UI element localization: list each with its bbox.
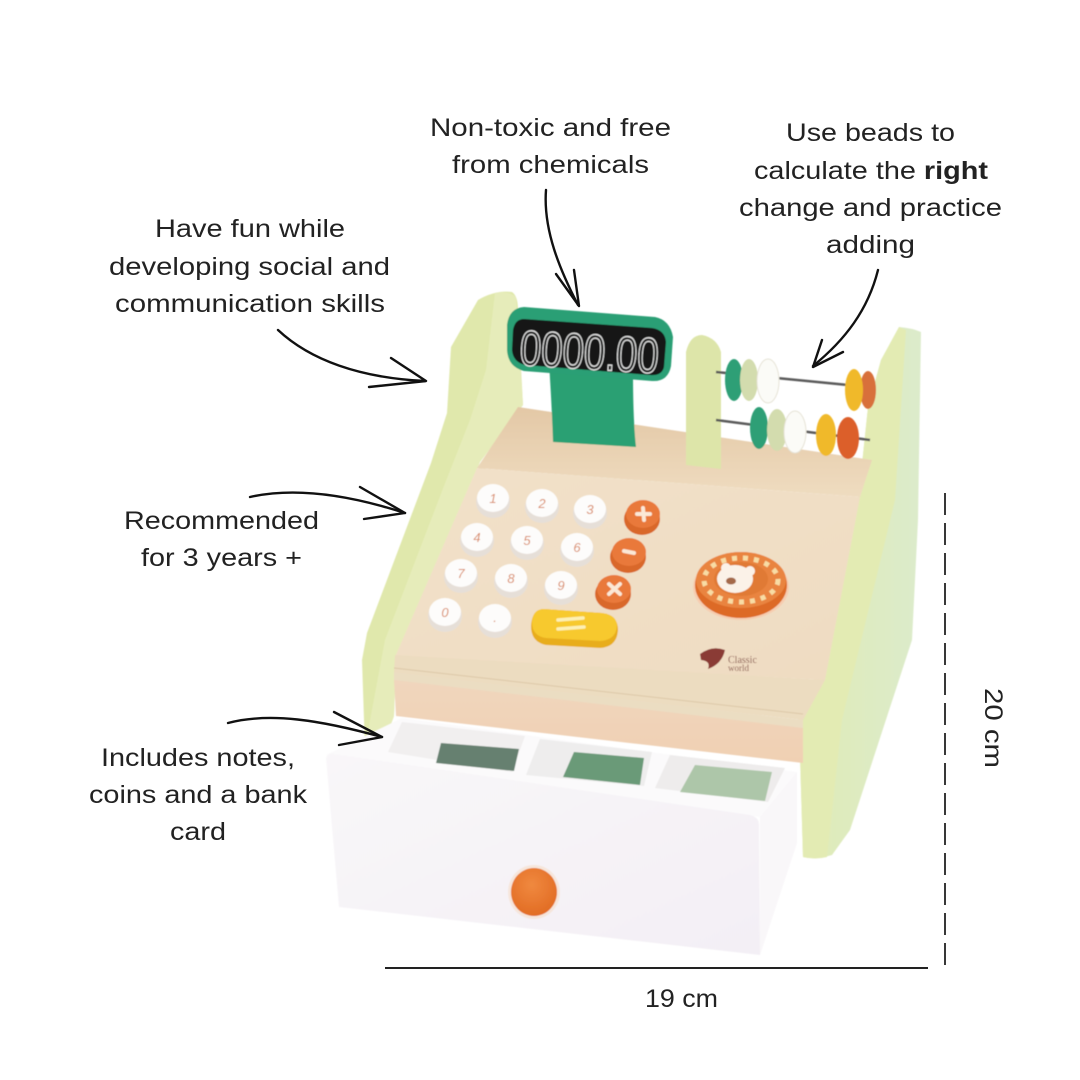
arrow: recommended to register: [250, 487, 405, 519]
brand logo: [700, 648, 757, 673]
text: recommended age: for 3 years +: [141, 544, 302, 572]
plywood edge and front face: [394, 655, 825, 763]
right side panel: [799, 327, 921, 858]
text: recommended age: Recommended: [124, 507, 319, 535]
text: recommended age: [124, 507, 319, 572]
drawer front: [326, 754, 760, 955]
text: includes: [89, 744, 308, 846]
dimension: width label: 19 cm: [645, 985, 718, 1013]
number keys: [428, 484, 607, 638]
heading: non-toxic: Non-toxic and free: [430, 114, 671, 142]
abacus: [716, 359, 876, 459]
number keys: 8: [507, 571, 515, 586]
arrow: includes to drawer: [228, 712, 382, 745]
brand logo: Classic: [728, 655, 757, 666]
number keys: 2: [537, 496, 546, 511]
display stem: [549, 362, 636, 447]
display: [507, 307, 673, 384]
dimension: width line: [385, 967, 928, 969]
number keys: 4: [473, 530, 481, 545]
text: have fun: [109, 215, 390, 318]
play money notes: [436, 743, 772, 801]
number keys: 9: [557, 578, 565, 593]
brand logo: world: [728, 663, 749, 673]
dimension: height line: [944, 493, 946, 965]
operator keys: [595, 500, 660, 610]
text: use beads: Use beads to: [786, 119, 955, 147]
wooden keypad plate: [395, 468, 860, 680]
wooden back deck: [477, 407, 872, 497]
text: includes: Includes notes,: [101, 744, 295, 772]
bear dial: [693, 552, 789, 620]
number keys: .: [493, 610, 497, 625]
number keys: 6: [573, 540, 581, 555]
text: have fun: communication skills: [115, 290, 385, 318]
text: use beads: adding: [826, 231, 915, 259]
text: includes: card: [170, 818, 226, 846]
equals key: [531, 609, 618, 648]
drawer knob: [508, 865, 560, 919]
abacus post: [686, 335, 721, 469]
arrow: beads to abacus: [813, 270, 878, 367]
dimension: height label: 20 cm: [979, 688, 1007, 768]
arrow: non-toxic to display: [546, 190, 579, 306]
number keys: 1: [489, 491, 497, 506]
text: use beads: change and practice: [739, 194, 1002, 222]
number keys: 3: [586, 502, 594, 517]
text: includes: coins and a bank: [89, 781, 308, 809]
drawer: [326, 718, 797, 955]
text: have fun: Have fun while: [155, 215, 345, 243]
number keys: 0: [441, 605, 449, 620]
left side panel: [362, 292, 523, 754]
cash register toy illustration: [326, 292, 921, 955]
text: use beads: calculate the right: [754, 157, 989, 185]
number keys: 5: [523, 533, 531, 548]
text: have fun: developing social and: [109, 253, 390, 281]
heading: non-toxic: [430, 114, 671, 179]
number keys: 7: [457, 566, 465, 581]
arrow: have fun to panel: [278, 330, 426, 387]
display digits: 0000.00: [518, 320, 660, 384]
heading: non-toxic: from chemicals: [452, 151, 649, 179]
drawer tray interior: [326, 718, 797, 955]
text: use beads: [739, 119, 1002, 259]
